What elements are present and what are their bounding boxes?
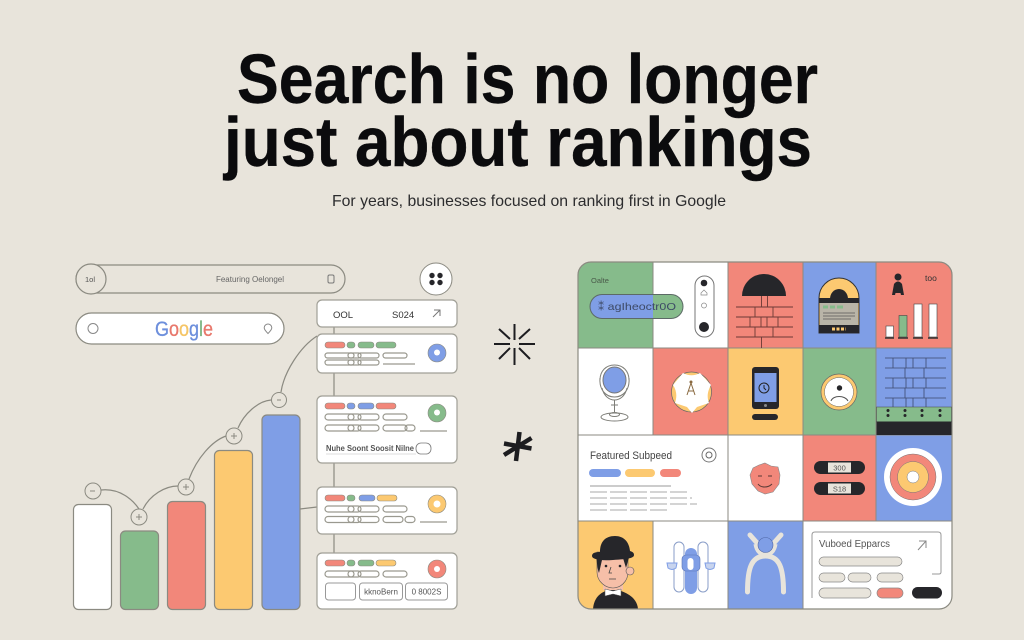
related experts card	[812, 532, 942, 598]
google search bar: Google	[155, 318, 213, 341]
search pill: ⁑ agIheoctr0O	[598, 300, 676, 313]
chart markers	[85, 392, 286, 525]
icon: compass shield	[672, 372, 712, 413]
score pills: 300	[833, 464, 846, 472]
result card 1	[317, 334, 457, 373]
header card: S024	[392, 310, 414, 321]
icon: vertical controls	[695, 276, 714, 337]
icon: profile badge	[821, 374, 857, 410]
mosaic row 4 cells	[578, 521, 952, 609]
related experts card: Vuboed Epparcs	[819, 539, 890, 550]
result card 4: kknoBern	[364, 588, 398, 596]
mosaic row 3 cells	[578, 435, 952, 521]
icon: arched card	[819, 278, 859, 333]
header card: OOL	[333, 310, 353, 321]
result card 4: 0 8002S	[412, 588, 441, 596]
result card 2: Nuhe Soont Soosit Nilne	[326, 444, 415, 453]
cell label: Oalte	[591, 276, 609, 285]
icon: dome on brick wall	[736, 274, 793, 348]
icon: sparkle burst	[494, 324, 535, 365]
result card 3	[317, 487, 457, 534]
icon: target	[884, 448, 942, 506]
bar chart	[74, 415, 300, 610]
result card 2	[317, 396, 457, 463]
icon: brick wall with stage	[876, 358, 952, 435]
top status pill: 1ol	[85, 275, 95, 284]
icon: red face badge	[750, 463, 780, 494]
top status pill	[76, 264, 345, 294]
panel: search rankings dashboard	[74, 263, 457, 610]
title	[222, 40, 818, 181]
title: Search is no longer	[237, 40, 818, 118]
header card	[317, 300, 457, 327]
title: just about rankings	[222, 103, 812, 181]
score pills	[814, 461, 865, 495]
icon: asterisk	[504, 432, 532, 461]
icon: figure and mini bars	[885, 273, 938, 338]
mosaic row 2 cells	[578, 348, 952, 435]
icon: smartphone	[752, 367, 779, 420]
panel: icon mosaic	[578, 262, 952, 609]
mosaic row 1 cells	[578, 262, 952, 348]
icon: microphone	[600, 365, 629, 421]
google search bar	[76, 313, 284, 344]
icon: menu dots	[420, 263, 452, 295]
search pill	[590, 294, 683, 318]
subtitle: For years, businesses focused on ranking first in Google	[332, 193, 726, 210]
featured snippet block	[589, 448, 716, 510]
top status pill: Featuring Oelongel	[216, 275, 284, 284]
featured snippet block: Featured Subpeed	[590, 450, 672, 462]
connector lines	[101, 327, 334, 553]
icon: figure and mini bars: too	[925, 273, 937, 283]
icon: blue device	[667, 542, 715, 594]
score pills: S18	[833, 484, 846, 494]
result card 4	[317, 553, 457, 609]
icon: person with hat	[592, 536, 638, 609]
icon: blue figure	[748, 535, 784, 592]
mosaic outer border	[578, 262, 952, 609]
